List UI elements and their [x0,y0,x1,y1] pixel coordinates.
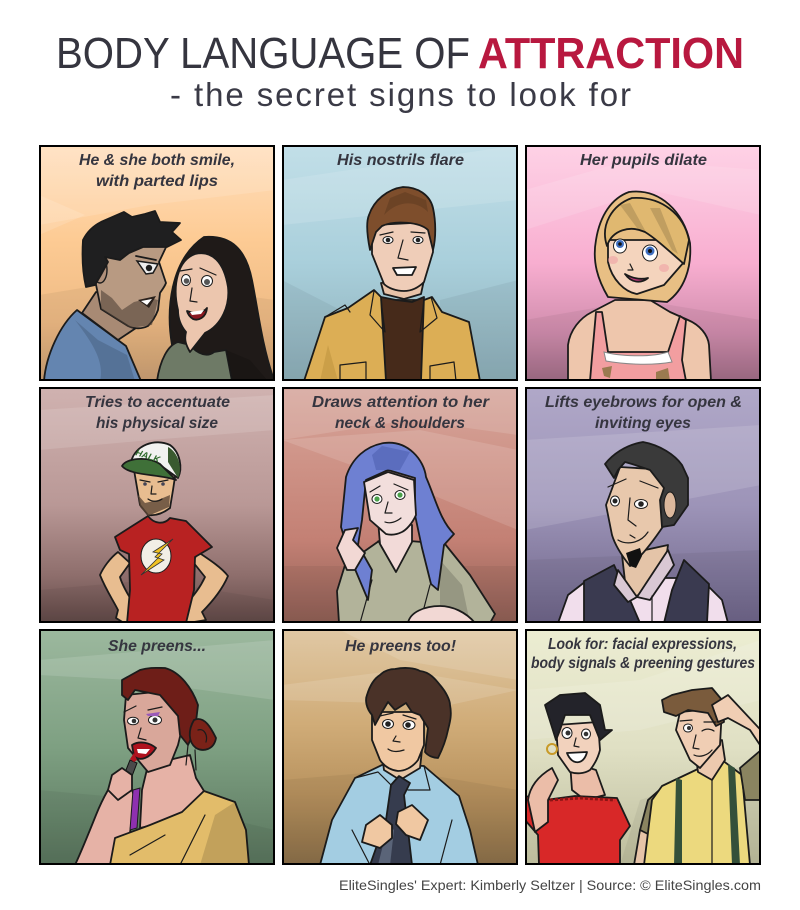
figure: man with tie [320,668,478,865]
figure: blonde woman [568,192,711,381]
caption: Her pupils dilate [580,152,707,169]
title [56,29,744,78]
caption: His nostrils flare [337,152,464,169]
caption: Draws attention to her [312,394,490,411]
figure: woman [157,237,275,381]
frame [40,630,274,864]
caption: Tries to accentuate [85,394,230,411]
caption [531,636,755,672]
figure: man [44,211,181,381]
panel: he and she both smile [39,145,275,381]
panel: lifts eyebrows [525,387,761,623]
caption [312,396,490,428]
figure: man with suspenders [634,688,770,865]
caption [79,152,235,190]
panel: accentuates physical size [39,387,275,623]
figure: man in jacket [304,187,480,381]
caption [545,394,742,432]
caption: inviting eyes [595,415,691,432]
source credit: EliteSingles' Expert: Kimberly Seltzer | Source: © EliteSingles.com [339,877,761,893]
figure: blue haired woman [337,443,495,623]
caption [85,394,230,432]
panel: look for [525,629,770,865]
frame [526,388,760,622]
panel: neck and shoulders [282,387,518,623]
frame [283,388,517,622]
frame [526,146,760,380]
caption: his physical size [96,415,218,432]
figure: woman with lipstick [75,668,249,865]
caption: She preens... [108,638,206,655]
figure: man with goatee [558,442,728,623]
panel: she preens [39,629,275,865]
panel: his nostrils flare [282,145,518,381]
caption: with parted lips [96,173,218,190]
panel: he preens too [282,629,518,865]
panel: her pupils dilate [525,145,761,381]
caption: body signals & preening gestures [531,655,755,672]
title: ATTRACTION [478,29,744,78]
frame [283,146,517,380]
figure: man in cap: HALK [134,447,163,465]
subtitle: - the secret signs to look for [170,76,631,113]
caption: neck & shoulders [335,415,465,432]
frame [40,388,274,622]
caption: He preens too! [345,638,456,655]
frame [40,146,274,380]
caption: He & she both smile, [79,152,235,169]
frame [283,630,517,864]
frame [526,630,760,864]
caption: Look for: facial expressions, [548,636,737,653]
figure: man in cap [100,442,228,623]
figure: woman in red dress [525,693,630,865]
caption: Lifts eyebrows for open & [545,394,742,411]
title: BODY LANGUAGE OF [56,29,470,78]
